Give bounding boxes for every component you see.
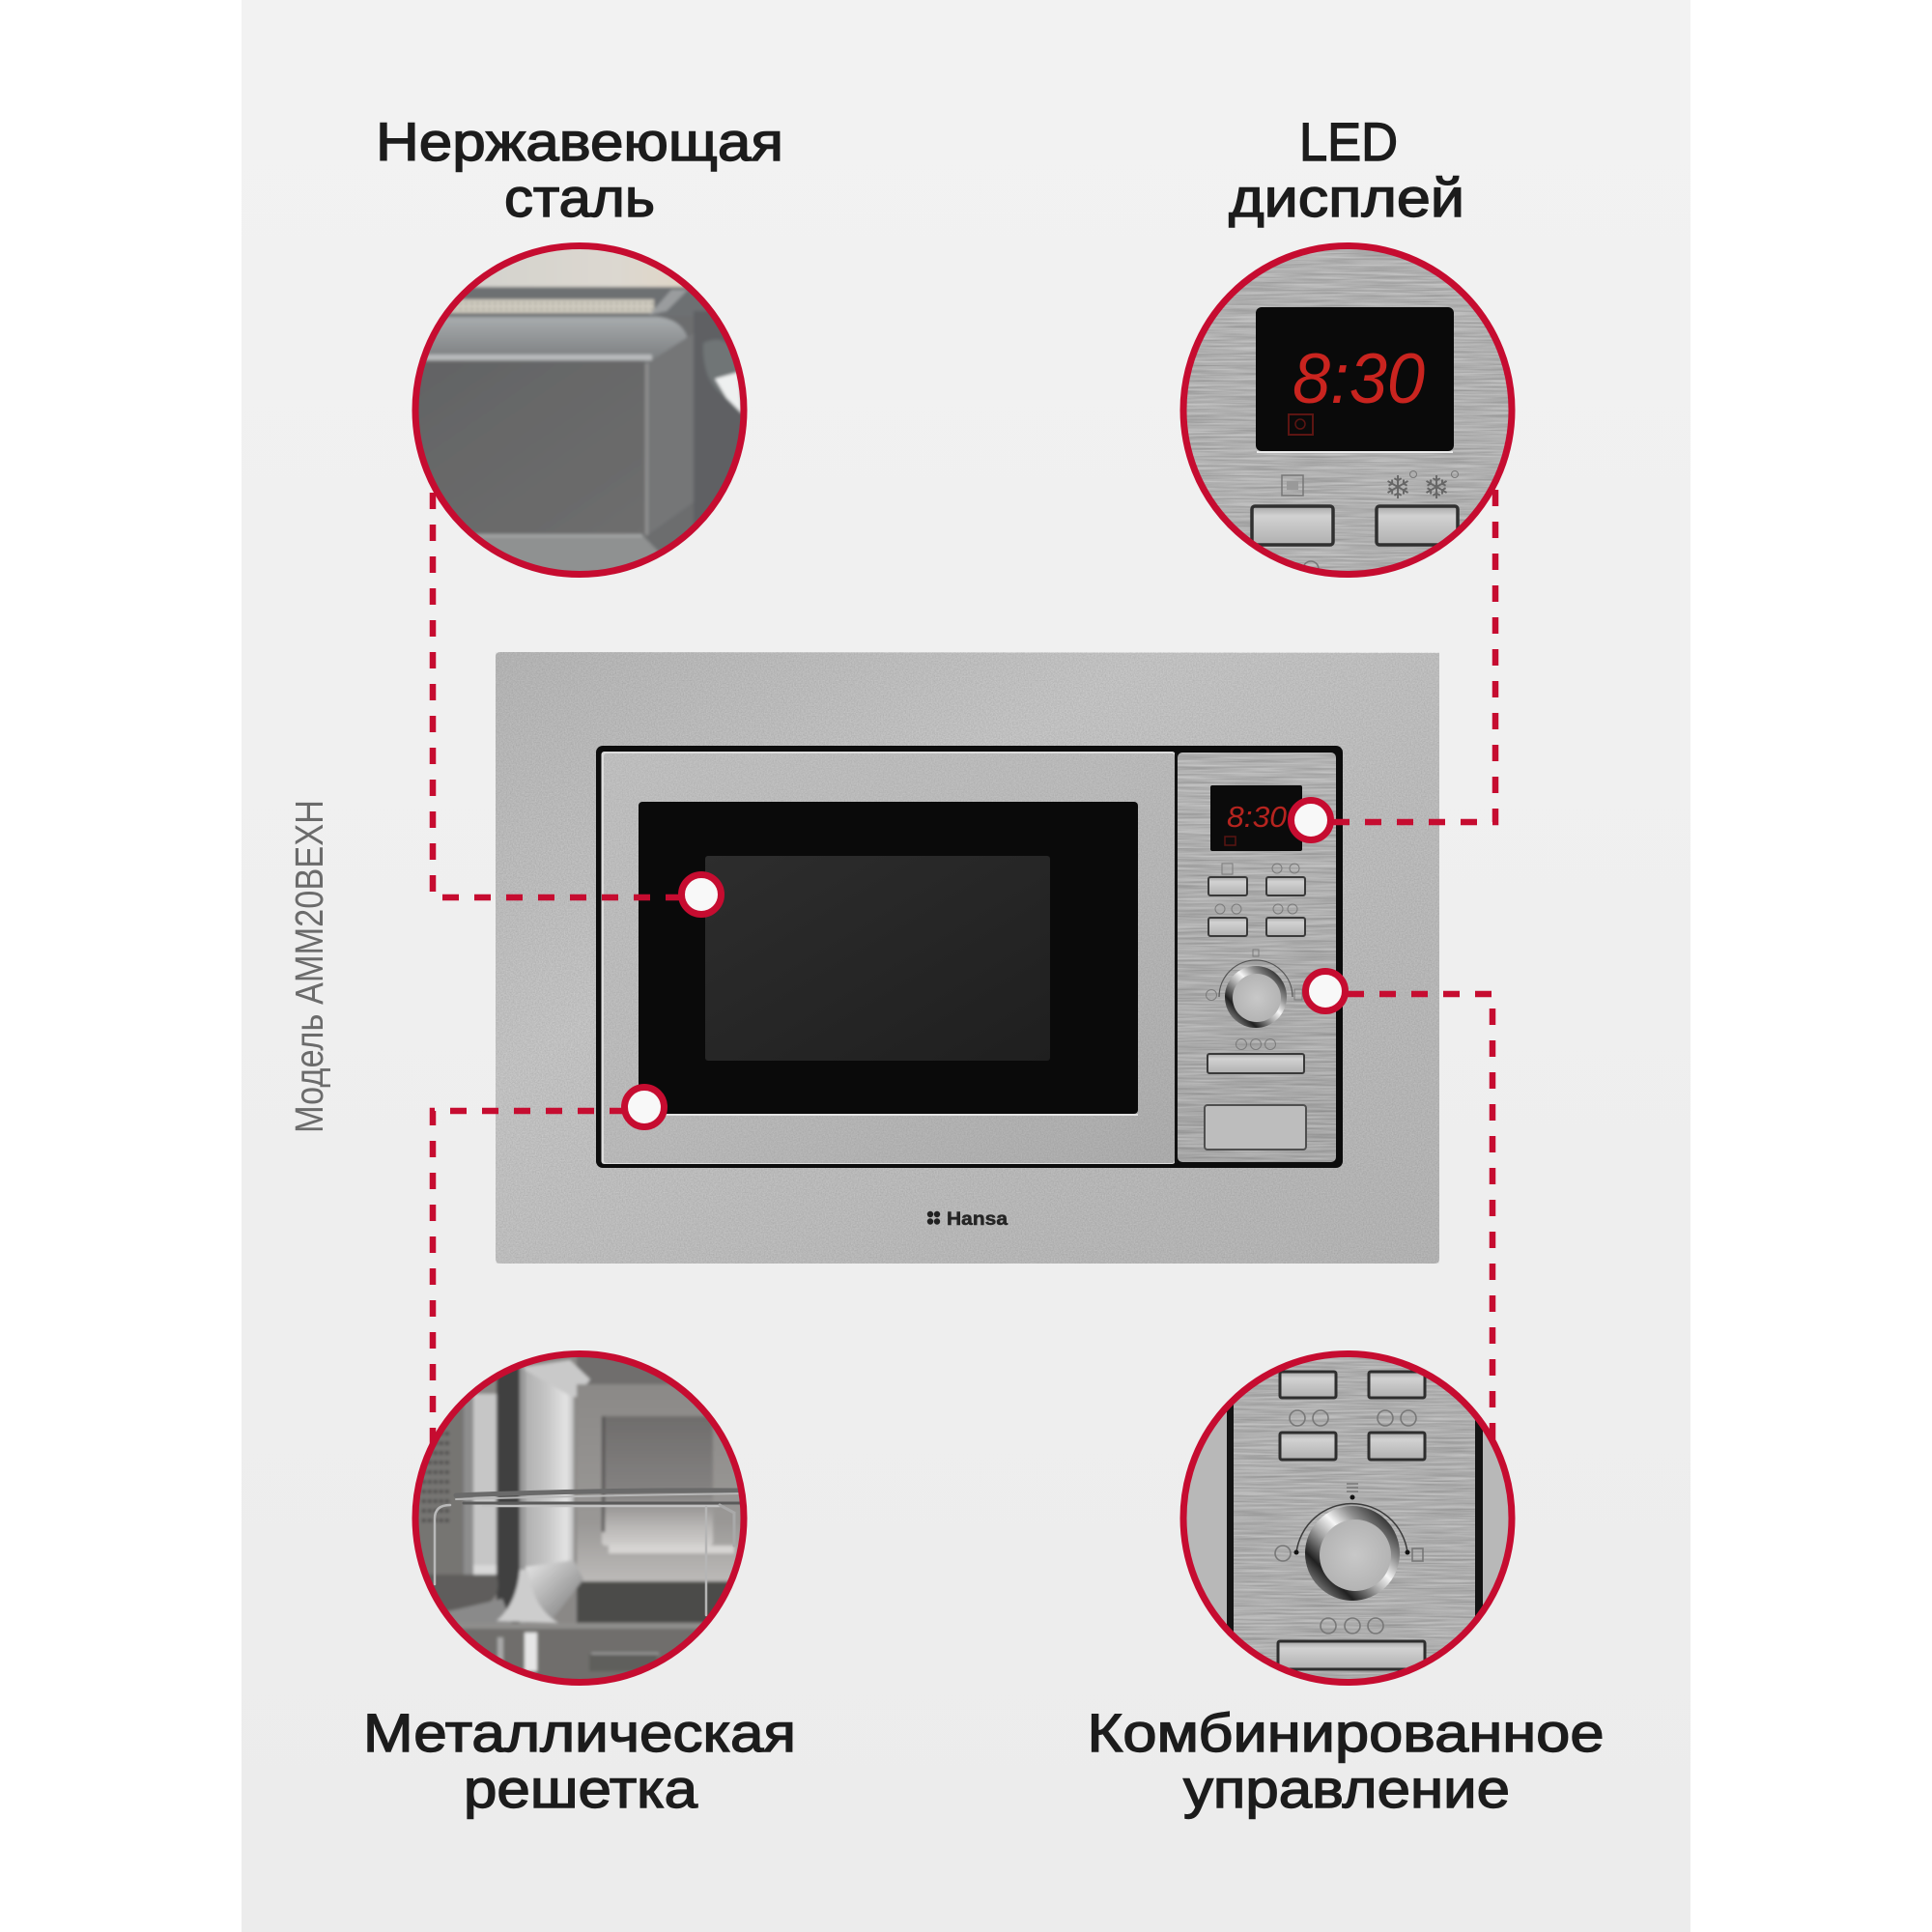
brand logo	[927, 1209, 1008, 1230]
heading: metal rack: Металлическая	[363, 1702, 796, 1763]
heading: metal rack: решетка	[464, 1758, 698, 1819]
display screen	[1256, 307, 1454, 453]
circle ring	[415, 245, 744, 574]
photo: steel cavity wall	[419, 249, 740, 571]
hotspot markers	[624, 800, 1345, 1126]
model label: Модель AMM20BEXH	[287, 800, 331, 1133]
door	[601, 752, 1175, 1164]
door and panel separator	[1175, 753, 1178, 1163]
leader: LED display	[1333, 483, 1495, 822]
circle ring	[1183, 245, 1512, 574]
rack wire ring	[435, 1491, 744, 1615]
button icons	[1281, 470, 1459, 498]
infographic canvas	[242, 0, 1690, 1932]
heading: stainless steel: Нержавеющая	[376, 111, 783, 172]
hotspot: steel cavity	[682, 875, 721, 914]
photo: rack inside cavity	[419, 1357, 740, 1679]
heading: LED display: LED	[1299, 111, 1398, 172]
display screen: 8:30	[1293, 340, 1425, 418]
hotspot: rack	[624, 1088, 665, 1126]
panel: metal rack	[363, 1338, 796, 1819]
mini LED display: 8:30	[1227, 800, 1287, 834]
button icons: ❄	[1423, 469, 1450, 506]
heading: stainless steel	[376, 111, 783, 228]
hotspot: controls	[1306, 972, 1345, 1010]
heading: LED display: дисплей	[1229, 167, 1464, 228]
button icons: ❄	[1384, 469, 1411, 506]
door window	[639, 802, 1138, 1116]
leader: combined controls	[1348, 994, 1492, 1444]
mini LED display	[1210, 785, 1302, 851]
door release button	[1205, 1105, 1306, 1150]
heading: combined controls	[1088, 1702, 1604, 1819]
photo: display closeup	[1186, 249, 1509, 571]
bright corner	[526, 1560, 583, 1619]
photo: controls closeup	[1186, 1357, 1509, 1679]
circle ring	[1183, 1354, 1512, 1683]
brand logo: Hansa	[947, 1209, 1008, 1230]
heading: combined controls: Комбинированное	[1088, 1702, 1604, 1763]
panel edges	[1227, 1391, 1483, 1642]
heading: combined controls: управление	[1183, 1758, 1510, 1819]
heading: LED display	[1229, 111, 1464, 228]
background panel	[242, 0, 1690, 1932]
mini buttons	[1208, 877, 1305, 1073]
mini button icons	[1206, 864, 1302, 1049]
icons	[1275, 1410, 1423, 1634]
microwave body outline	[596, 746, 1343, 1168]
control panel	[1178, 753, 1336, 1162]
trim frame	[496, 652, 1439, 1264]
panel: LED display	[1174, 111, 1521, 584]
heading: metal rack	[363, 1702, 796, 1819]
buttons	[1252, 506, 1458, 545]
panel: combined controls	[1088, 1343, 1604, 1819]
mini knob	[1219, 960, 1293, 1028]
microwave in trim frame	[496, 652, 1439, 1264]
leader: stainless steel	[433, 483, 682, 897]
dial	[1294, 1495, 1410, 1601]
hotspot: display	[1291, 800, 1331, 840]
perforation	[422, 1434, 449, 1520]
circle ring	[415, 1354, 744, 1683]
leader: metal rack	[433, 1111, 626, 1444]
buttons	[1278, 1372, 1425, 1669]
callout leader lines	[433, 483, 1495, 1444]
panel: stainless steel	[376, 111, 783, 594]
heading: stainless steel: сталь	[504, 167, 655, 228]
